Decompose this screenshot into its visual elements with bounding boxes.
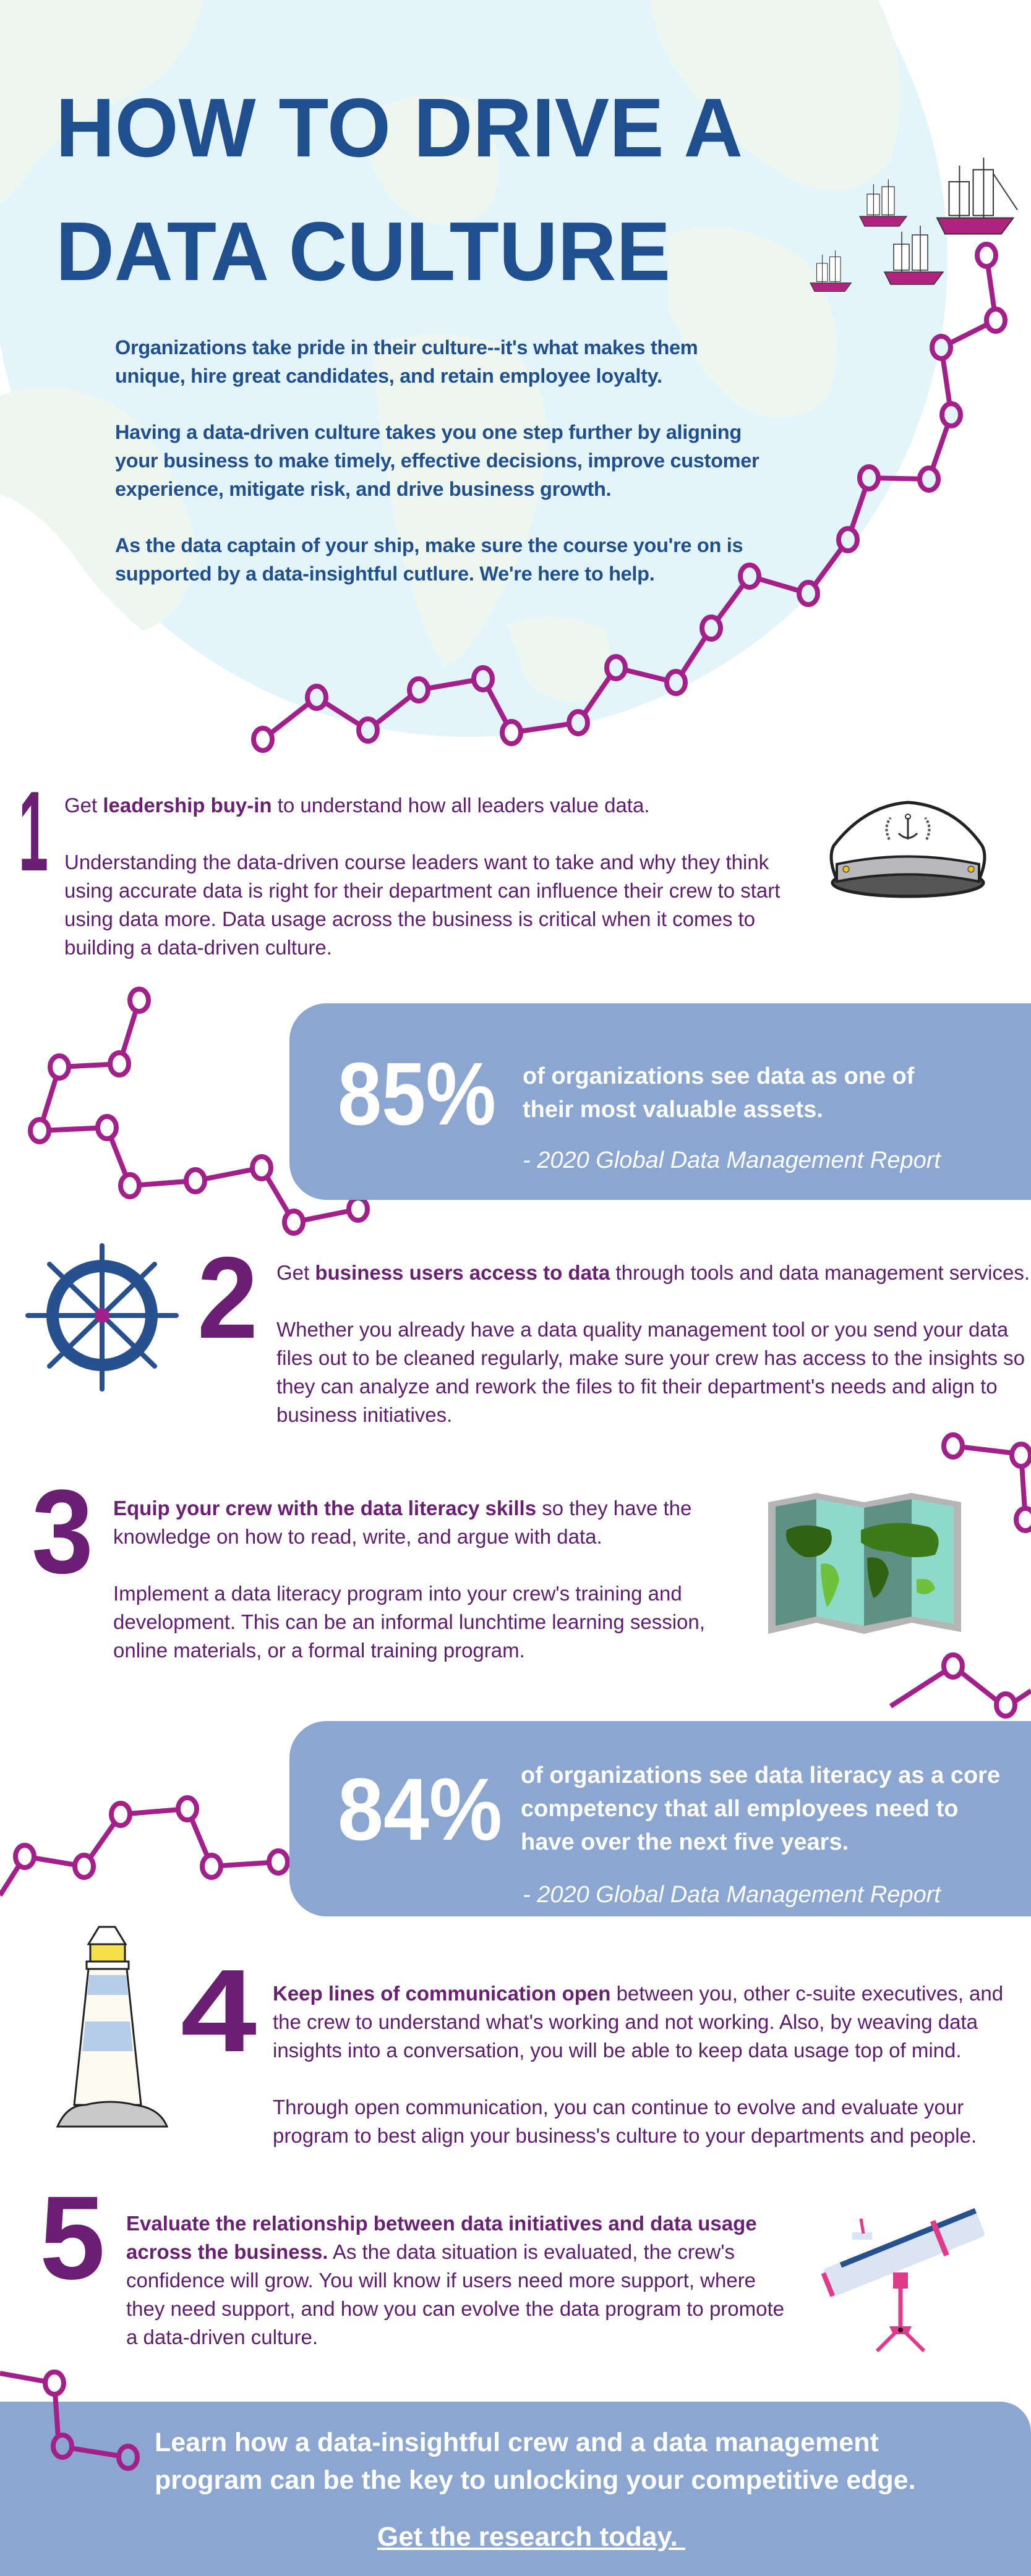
step 1 text: [64, 794, 781, 959]
step 1 text: using data more. Data usage across the business is critical when it comes to: [64, 908, 755, 930]
source: - 2020 Global Data Management Report: [523, 1147, 941, 1173]
step 4 text: insights into a conversation, you will be able to keep data usage top of mind.: [273, 2039, 962, 2062]
step 2 text: Get business users access to data through tools and data management services.: [276, 1261, 1030, 1284]
route line: left of 84%: [0, 1798, 288, 1895]
call to action link: Get the research today.: [377, 2522, 678, 2552]
icon: ships: [810, 158, 1018, 292]
step 2 text: business initiatives.: [276, 1403, 452, 1426]
step 3 text: online materials, or a formal training program.: [113, 1639, 525, 1662]
footer text: Learn how a data-insightful crew and a data management: [155, 2428, 879, 2457]
intro text: Organizations take pride in their culture--it's what makes them: [115, 336, 698, 359]
globe: [0, 0, 948, 737]
stat text: of organizations see data as one of: [523, 1063, 914, 1089]
intro text: Having a data-driven culture takes you one step further by aligning: [115, 421, 742, 443]
footer text: program can be the key to unlocking your competitive edge.: [155, 2465, 916, 2495]
title: DATA CULTURE: [56, 205, 670, 297]
icon: captain hat: [830, 801, 986, 898]
step 2 text: files out to be cleaned regularly, make sure your crew has access to the insights so: [276, 1346, 1025, 1369]
step 3 text: knowledge on how to read, write, and argue with data.: [113, 1525, 602, 1548]
intro text: unique, hire great candidates, and retain employee loyalty.: [115, 365, 662, 387]
step 1 text: using accurate data is right for their department can influence their crew to start: [64, 879, 780, 902]
title: HOW TO DRIVE A: [56, 81, 743, 174]
step 5 text: across the business. As the data situation is evaluated, the crew's: [126, 2240, 735, 2263]
step 5 text: [126, 2212, 784, 2349]
footer banner: [0, 2402, 1031, 2576]
step 1 text: building a data-driven culture.: [64, 936, 332, 959]
stat text: have over the next five years.: [521, 1829, 849, 1855]
stat text: their most valuable assets.: [523, 1097, 823, 1123]
icon: lighthouse: [56, 1926, 168, 2128]
step 2 text: Whether you already have a data quality management tool or you send your data: [276, 1318, 1008, 1341]
title: [56, 81, 743, 297]
stat text: [521, 1762, 1000, 1855]
step 4 text: Keep lines of communication open between you, other c-suite executives, and: [273, 1982, 1003, 2005]
route line: footer: [0, 2370, 140, 2471]
step 2 text: [276, 1261, 1030, 1426]
footer text: [155, 2428, 916, 2495]
step 2 text: they can analyze and rework the files to fit their department's needs and align to: [276, 1375, 998, 1398]
step 3 text: [113, 1497, 705, 1662]
icon: folded map: [768, 1493, 961, 1634]
stat box: 84%: [289, 1721, 1031, 1916]
route line: top: [254, 244, 1005, 750]
intro text: As the data captain of your ship, make sure the course you're on is: [115, 534, 743, 556]
step 4 text: [273, 1982, 1003, 2147]
stat text: [523, 1063, 914, 1123]
intro text: supported by a data-insightful cutlure. We're here to help.: [115, 563, 654, 585]
stat text: of organizations see data literacy as a core: [521, 1762, 1000, 1788]
step 5 text: confidence will grow. You will know if users need more support, where: [126, 2269, 756, 2292]
stat text: competency that all employees need to: [521, 1796, 958, 1822]
step 4 text: program to best align your business's culture to your departments and people.: [273, 2124, 977, 2147]
step 4 text: Through open communication, you can continue to evolve and evaluate your: [273, 2096, 964, 2119]
intro text: your business to make timely, effective decisions, improve customer: [115, 449, 759, 472]
route line: right of step 3: [891, 1435, 1031, 1716]
source: - 2020 Global Data Management Report: [523, 1882, 941, 1908]
icon: telescope: [821, 2208, 985, 2353]
route line: left of 85%: [30, 989, 367, 1233]
step 3 text: Equip your crew with the data literacy skills so they have the: [113, 1497, 691, 1520]
icon: ship wheel: [25, 1243, 179, 1392]
step 1 text: Get leadership buy-in to understand how all leaders value data.: [64, 794, 649, 817]
step 1 text: Understanding the data-driven course leaders want to take and why they think: [64, 851, 769, 874]
step 4 text: the crew to understand what's working and not working. Also, by weaving data: [273, 2010, 978, 2033]
step 3 text: development. This can be an informal lunchtime learning session,: [113, 1610, 705, 1633]
step 3 text: Implement a data literacy program into your crew's training and: [113, 1582, 682, 1605]
step 5 text: a data-driven culture.: [126, 2326, 318, 2349]
step 5 text: they need support, and how you can evolve the data program to promote: [126, 2297, 784, 2320]
intro text: experience, mitigate risk, and drive business growth.: [115, 478, 611, 500]
intro text: [115, 336, 759, 585]
stat box: 85%: [289, 1003, 1031, 1200]
step 5 text: Evaluate the relationship between data initiatives and data usage: [126, 2212, 757, 2235]
